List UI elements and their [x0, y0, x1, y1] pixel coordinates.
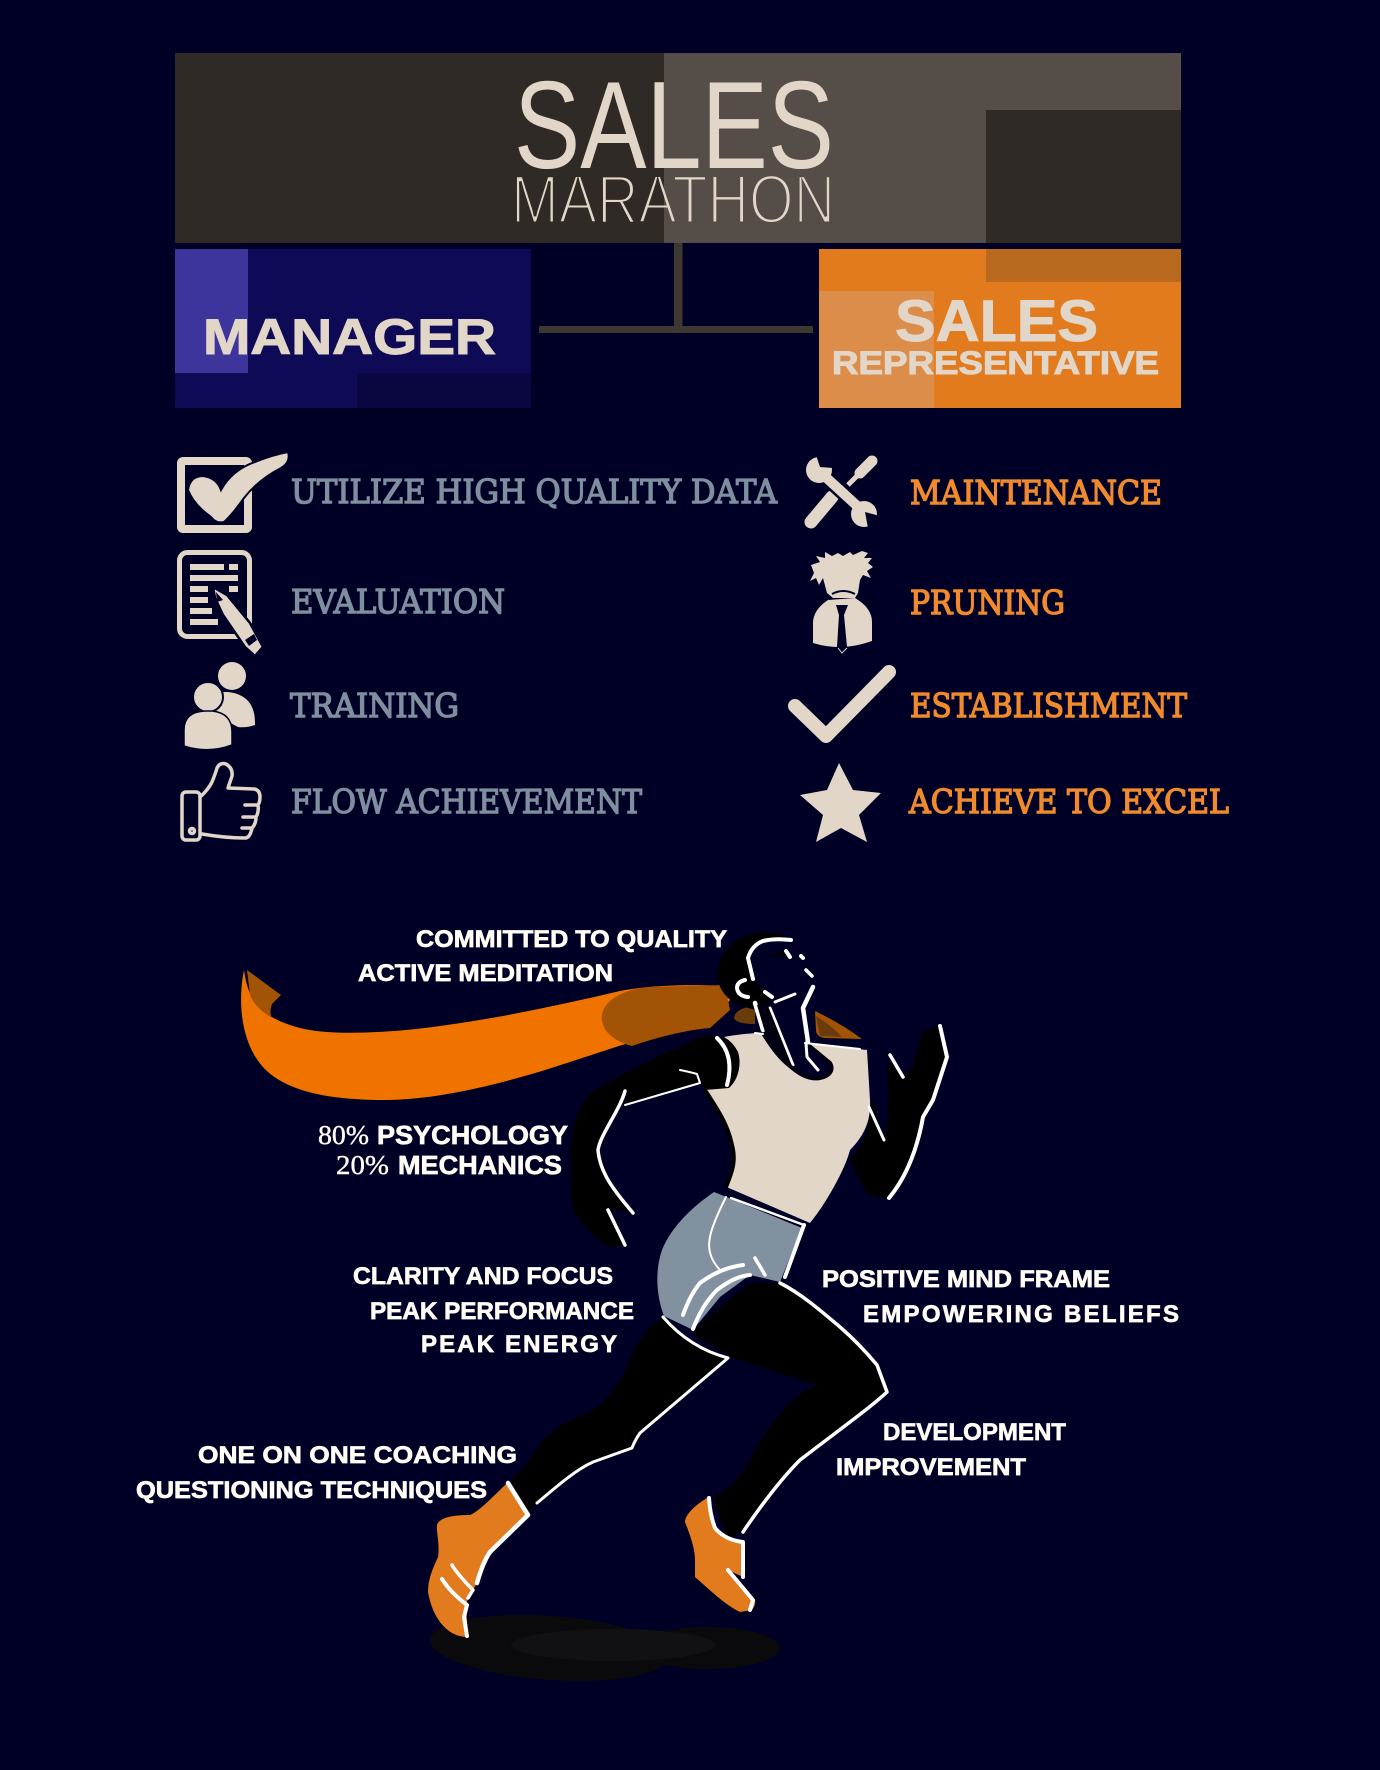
front leg	[693, 1283, 887, 1537]
heading: manager: MANAGER	[203, 309, 496, 365]
item: evaluation: EVALUATION	[291, 582, 505, 621]
labels: development: DEVELOPMENT	[883, 1419, 1066, 1446]
labels: 80% psychology: PSYCHOLOGY	[377, 1120, 568, 1150]
rear leg	[510, 1317, 728, 1512]
icon: large checkmark	[795, 672, 889, 736]
heading: sales: SALES	[895, 289, 1098, 354]
icon: person with tie	[810, 551, 873, 653]
labels: peak performance: PEAK PERFORMANCE	[370, 1298, 634, 1325]
icon: checkbox	[181, 452, 289, 529]
item: achieve to excel: ACHIEVE TO EXCEL	[908, 782, 1229, 821]
icon: people	[184, 662, 255, 750]
rear shoe	[428, 1483, 528, 1637]
labels: 20% mechanics	[336, 1150, 562, 1180]
labels: 20% mechanics: MECHANICS	[398, 1150, 562, 1180]
icon: thumbs up	[182, 764, 260, 840]
rear arm	[570, 1036, 741, 1246]
illustration: running figure	[241, 933, 947, 1688]
connector lines	[539, 243, 813, 333]
item: pruning: PRUNING	[910, 583, 1065, 622]
item: utilize high quality data: UTILIZE HIGH QUALITY DATA	[291, 472, 778, 511]
icon: wrench and screwdriver	[806, 452, 880, 530]
labels: 20% mechanics: 20%	[336, 1150, 389, 1180]
heading: representative: REPRESENTATIVE	[832, 345, 1159, 381]
white contour lines	[442, 1026, 947, 1636]
labels: clarity and focus: CLARITY AND FOCUS	[353, 1263, 613, 1290]
panel: manager	[175, 249, 531, 408]
front shoe	[685, 1498, 755, 1612]
item: flow achievement: FLOW ACHIEVEMENT	[291, 782, 642, 821]
panel: sales representative	[819, 249, 1181, 408]
hair	[717, 933, 791, 1010]
title: SALES: SALES	[514, 57, 834, 195]
shorts	[657, 1192, 802, 1330]
labels: positive mind frame: POSITIVE MIND FRAME	[822, 1266, 1110, 1293]
labels: peak energy: PEAK ENERGY	[421, 1331, 617, 1358]
panel: title banner	[175, 53, 1181, 243]
subtitle: MARATHON: MARATHON	[511, 161, 835, 238]
face details	[737, 939, 813, 1066]
icon: document and pencil	[180, 552, 263, 656]
labels: improvement: IMPROVEMENT	[836, 1454, 1026, 1481]
labels: 80% psychology: 80%	[318, 1120, 369, 1150]
tank top	[705, 1033, 870, 1223]
item: establishment: ESTABLISHMENT	[910, 686, 1187, 725]
item: training: TRAINING	[290, 686, 459, 725]
front arm and hand	[850, 1026, 947, 1198]
item: maintenance: MAINTENANCE	[910, 473, 1162, 512]
labels: committed to quality: COMMITTED TO QUALITY	[416, 926, 727, 953]
icon: star	[800, 763, 881, 842]
labels: one on one coaching: ONE ON ONE COACHING	[198, 1442, 517, 1469]
labels: questioning techniques: QUESTIONING TECHNIQUES	[136, 1477, 487, 1504]
labels: active meditation: ACTIVE MEDITATION	[358, 960, 613, 987]
ground shadow	[428, 1608, 780, 1688]
labels: empowering beliefs: EMPOWERING BELIEFS	[863, 1301, 1179, 1328]
orange cape	[241, 970, 862, 1100]
